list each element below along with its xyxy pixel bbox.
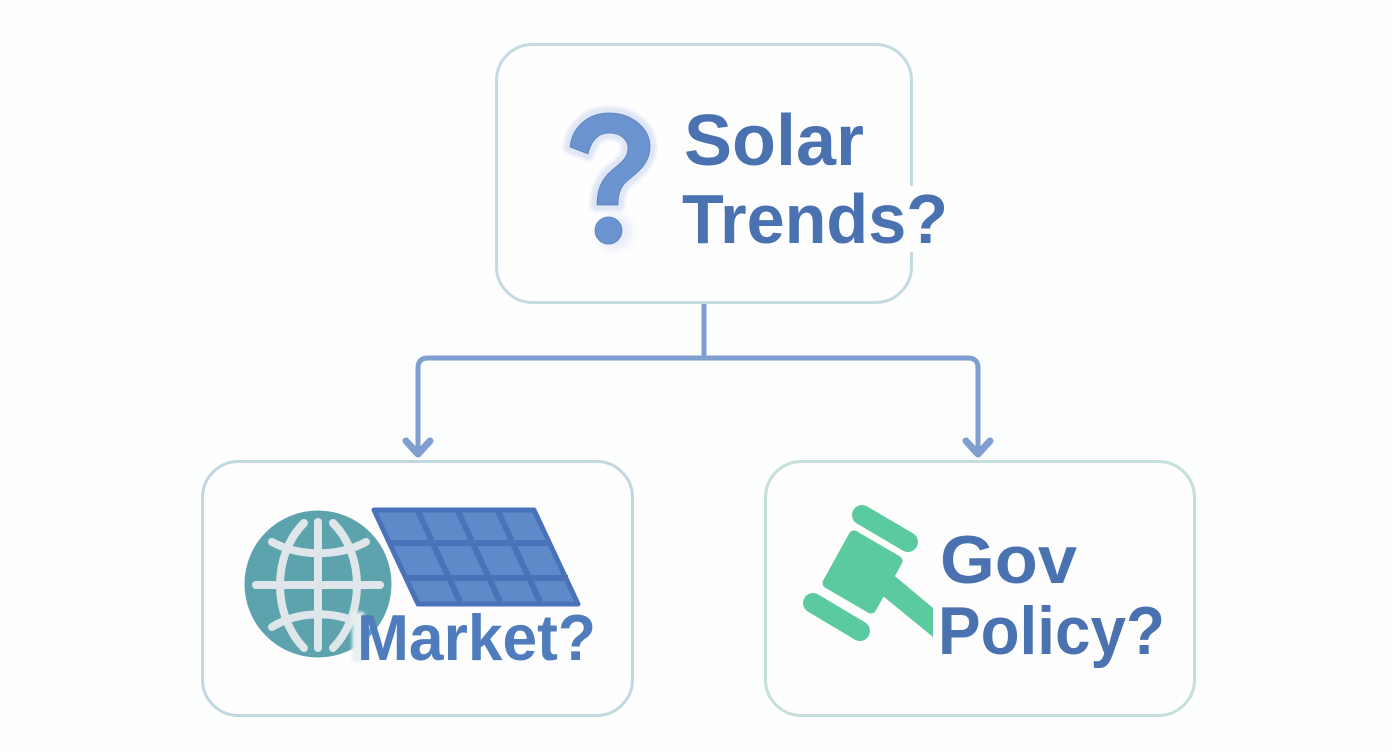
panel border [496,44,912,302]
heading: Solar Trends?: Solar [684,101,864,181]
panel border [766,462,1194,716]
icon: gavel [813,515,933,637]
panel: solar trends [496,44,952,302]
label: Gov Policy? [938,522,1165,669]
heading: Solar Trends?: Trends? [682,180,948,258]
icon: question mark [570,113,650,250]
heading: Solar Trends? [682,101,952,258]
panel border [202,462,632,716]
label: Gov Policy?: Gov [940,522,1077,598]
icon: solar panel [374,509,578,604]
icon: globe [244,510,392,658]
label: Market?: Market? [357,601,596,674]
panel: government policy [766,462,1194,716]
panel: market [202,462,632,716]
connector: tree with two arrows [406,304,990,454]
label: Gov Policy?: Policy? [938,593,1165,669]
